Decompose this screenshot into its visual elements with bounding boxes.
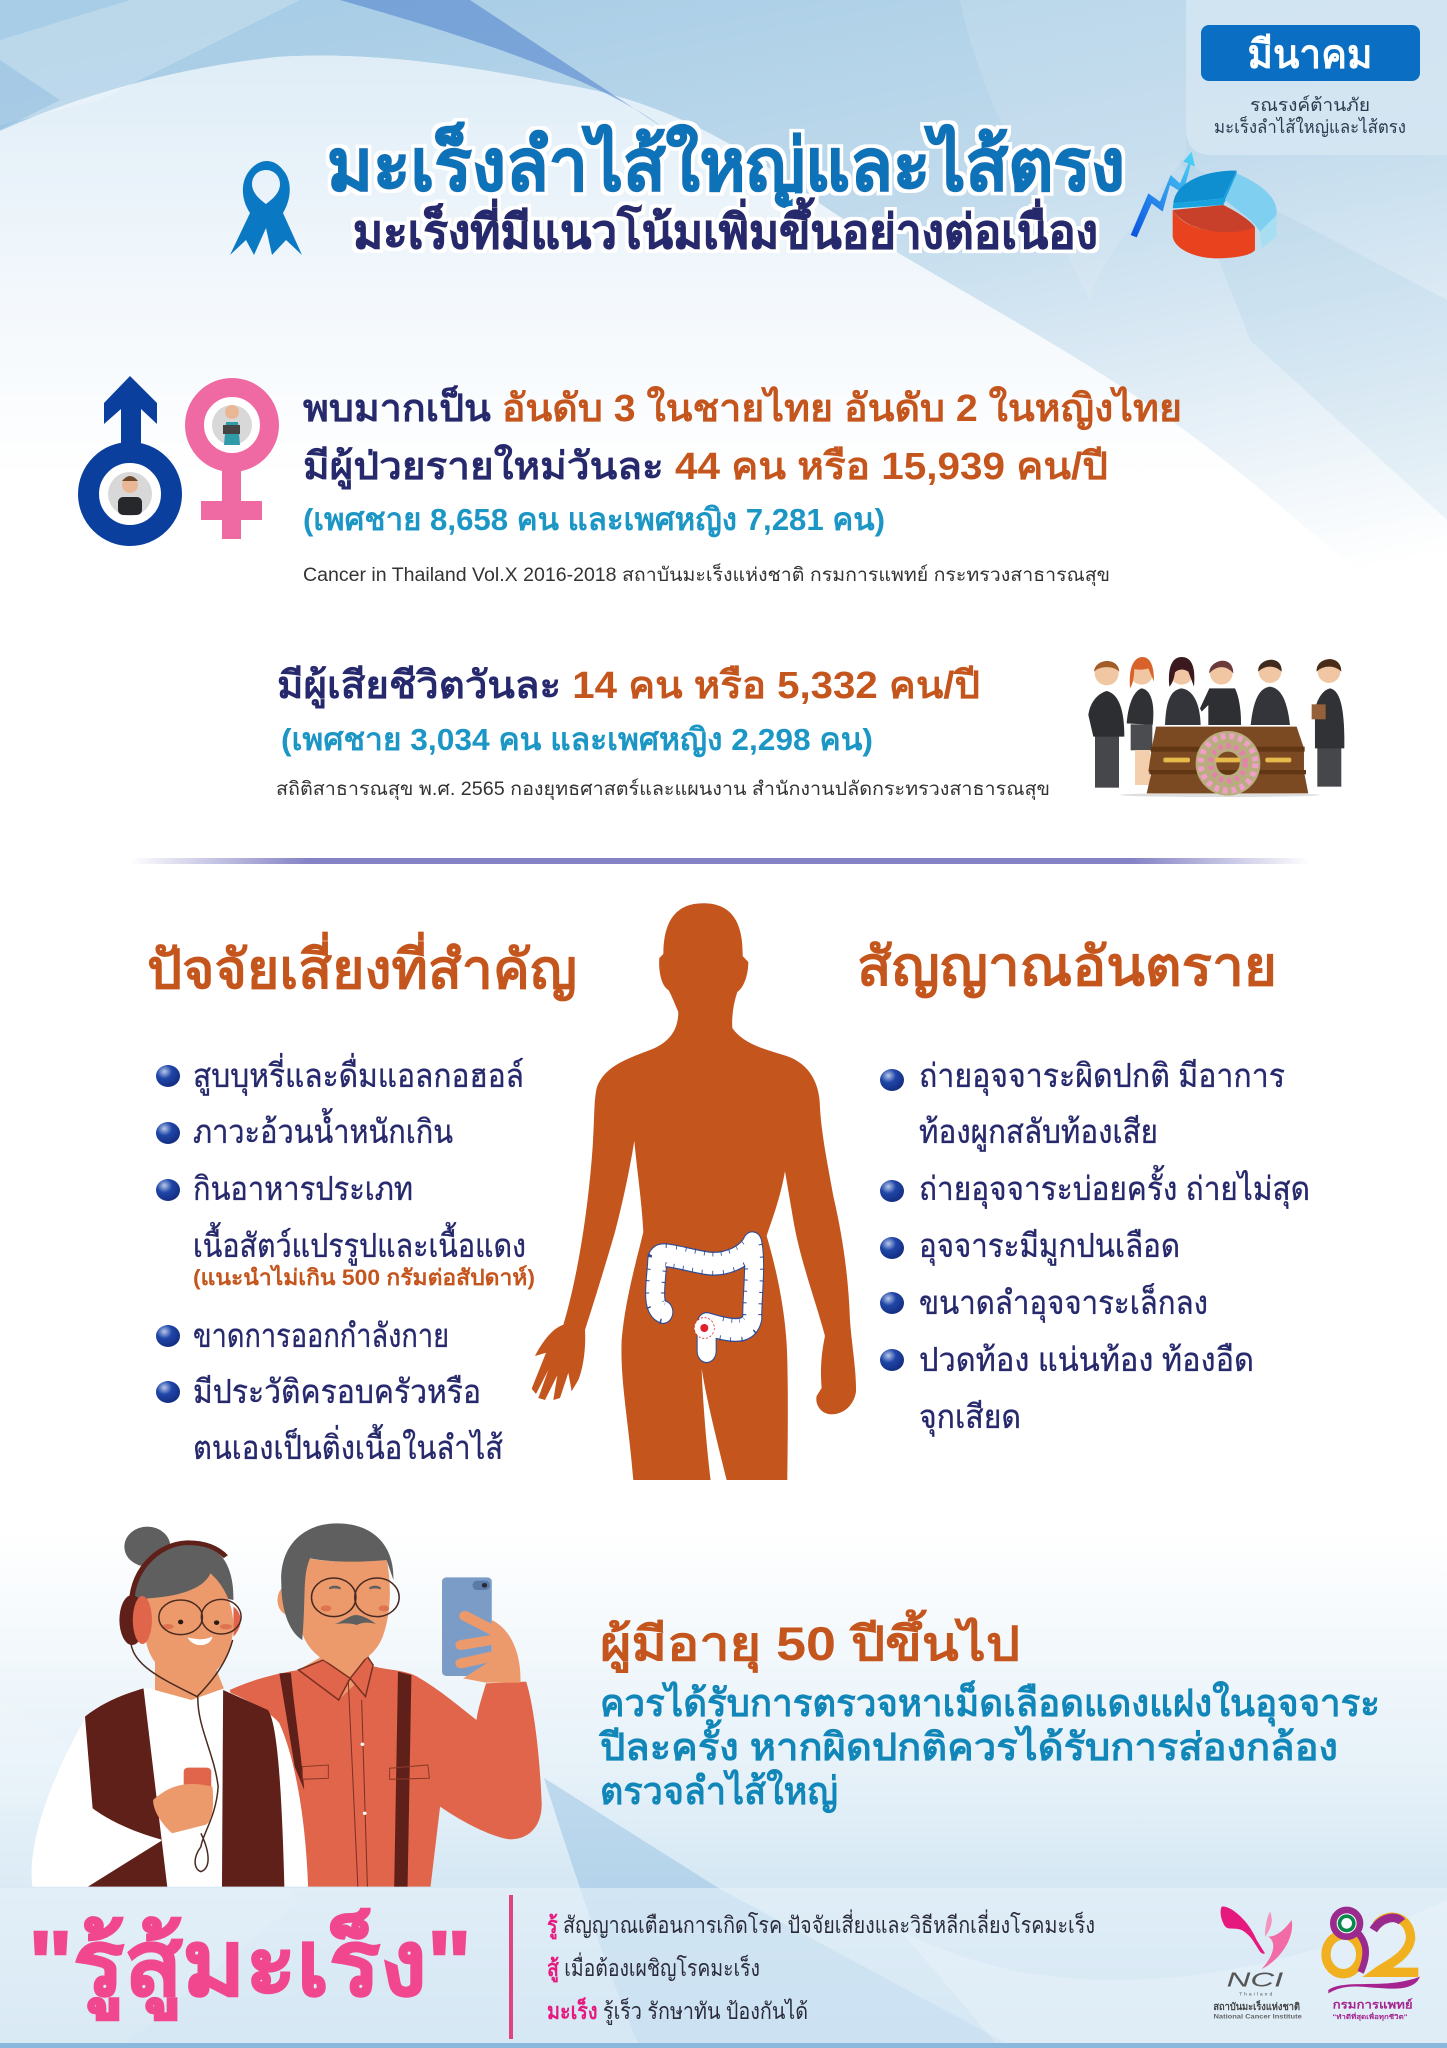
icon: female symbol (194, 388, 270, 539)
campaign caption: มะเร็งลำไส้ใหญ่และไส้ตรง (1214, 115, 1406, 137)
logo: National Cancer Institute: สถาบันมะเร็งแห่งชาติ (1213, 1999, 1300, 2013)
gender breakdown: (เพศชาย 8,658 คน และเพศหญิง 7,281 คน) (303, 502, 885, 538)
stats text: incidence (303, 385, 1182, 538)
heading: warning signs: สัญญาณอันตราย (857, 937, 1277, 998)
logo: National Cancer Institute: NCI (1227, 1970, 1284, 1992)
new patients per day: มีผู้ป่วยรายใหม่วันละ 44 คน หรือ 15,939 คน/ปี (303, 444, 1108, 490)
icon: male symbol (88, 376, 172, 536)
text: screening advice heading: ผู้มีอายุ 50 ปีขึ้นไป (600, 1609, 1020, 1674)
heading: risk factors: ปัจจัยเสี่ยงที่สำคัญ (147, 931, 577, 1001)
illustration: mourners and coffin (1088, 657, 1344, 797)
slogan explanation: สู้ เมื่อต้องเผชิญโรคมะเร็ง (547, 1952, 760, 1983)
stats text: mortality (277, 665, 980, 758)
text: screening advice: ควรได้รับการตรวจหาเม็ดเลือดแดงแฝงในอุจจาระ (600, 1680, 1380, 1727)
list: risk factors: ตนเองเป็นติ่งเนื้อในลำไส้ (193, 1424, 503, 1466)
list: warning signs: ถ่ายอุจจาระผิดปกติ มีอาการ (919, 1057, 1285, 1096)
list: warning signs: ขนาดลำอุจจาระเล็กลง (919, 1283, 1208, 1323)
list: warning signs: อุจจาระมีมูกปนเลือด (919, 1227, 1180, 1266)
list: risk factors: สูบบุหรี่และดื่มแอลกอฮอล์ (193, 1053, 524, 1096)
icon: pie chart with rising arrow (1131, 152, 1277, 258)
title (327, 122, 1125, 258)
month button: มีนาคม (1248, 33, 1372, 77)
slogan explanation: รู้ สัญญาณเตือนการเกิดโรค ปัจจัยเสี่ยงและวิธีหลีกเลี่ยงโรคมะเร็ง (547, 1909, 1095, 1940)
logo: National Cancer Institute: National Cancer Institute (1213, 2013, 1302, 2020)
list: warning signs: จุกเสียด (919, 1398, 1021, 1437)
logo: Department of Medical Services: กรมการแพทย์ (1333, 1997, 1413, 2011)
text: screening advice: ตรวจลำไส้ใหญ่ (600, 1769, 838, 1813)
list: risk factors: มีประวัติครอบครัวหรือ (193, 1373, 481, 1410)
logo: National Cancer Institute: Thailand (1239, 1992, 1274, 1998)
list: warning signs: ถ่ายอุจจาระบ่อยครั้ง ถ่ายไม่สุด (919, 1165, 1310, 1209)
logo: Department of Medical Services: "ทำดีที่สุดเพื่อทุกชีวิต" (1332, 2012, 1407, 2021)
list: risk factors: กินอาหารประเภท (193, 1170, 413, 1207)
source note: mortality: สถิติสาธารณสุข พ.ศ. 2565 กองยุทธศาสตร์และแผนงาน สำนักงานปลัดกระทรวงสาธารณสุข (276, 778, 1050, 801)
list: risk factors: ภาวะอ้วนน้ำหนักเกิน (193, 1108, 453, 1150)
month tab panel (1186, 0, 1447, 155)
colon (655, 1243, 754, 1351)
subtitle: มะเร็งที่มีแนวโน้มเพิ่มขึ้นอย่างต่อเนื่อง (353, 197, 1098, 258)
text: screening advice (598, 1680, 1380, 1813)
month button (1201, 25, 1420, 81)
title: มะเร็งลำไส้ใหญ่และไส้ตรง (327, 122, 1125, 208)
footer band (0, 1888, 1447, 2048)
campaign caption: รณรงค์ต้านภัย (1250, 95, 1370, 115)
illustration: elderly couple (32, 1523, 542, 1887)
campaign caption (1214, 95, 1406, 137)
list: warning signs: ปวดท้อง แน่นท้อง ท้องอืด (919, 1341, 1254, 1378)
text: screening advice: ปีละครั้ง หากผิดปกติควรได้รับการส่องกล้อง (598, 1719, 1338, 1769)
source note: incidence: Cancer in Thailand Vol.X 2016-2018 สถาบันมะเร็งแห่งชาติ กรมการแพทย์ กระทรวงสาธารณสุข (303, 562, 1110, 587)
list: risk factors: (แนะนำไม่เกิน 500 กรัมต่อสัปดาห์) (193, 1264, 535, 1290)
list: warning signs: ท้องผูกสลับท้องเสีย (919, 1113, 1158, 1152)
logo: Department of Medical Services (1326, 1910, 1420, 2021)
man (230, 1523, 542, 1887)
logo: National Cancer Institute (1213, 1907, 1302, 2020)
campaign slogan: "รู้สู้มะเร็ง" (28, 1908, 472, 2021)
stats text: incidence: พบมากเป็น อันดับ 3 ในชายไทย อันดับ 2 ในหญิงไทย (303, 385, 1182, 430)
icon: blue ribbon (230, 161, 302, 255)
list: risk factors: เนื้อสัตว์แปรรูปและเนื้อแดง (193, 1222, 526, 1266)
illustration: human body with colon (532, 903, 856, 1480)
list: warning signs (880, 1057, 1310, 1437)
woman (32, 1527, 308, 1887)
slogan explanation: มะเร็ง รู้เร็ว รักษาทัน ป้องกันได้ (547, 1996, 808, 2025)
stats text: mortality: มีผู้เสียชีวิตวันละ 14 คน หรือ 5,332 คน/ปี (277, 665, 980, 709)
slogan explanation (547, 1909, 1095, 2025)
mortality breakdown: (เพศชาย 3,034 คน และเพศหญิง 2,298 คน) (281, 722, 873, 758)
list: risk factors: ขาดการออกกำลังกาย (193, 1317, 449, 1354)
list: risk factors (156, 1053, 535, 1466)
